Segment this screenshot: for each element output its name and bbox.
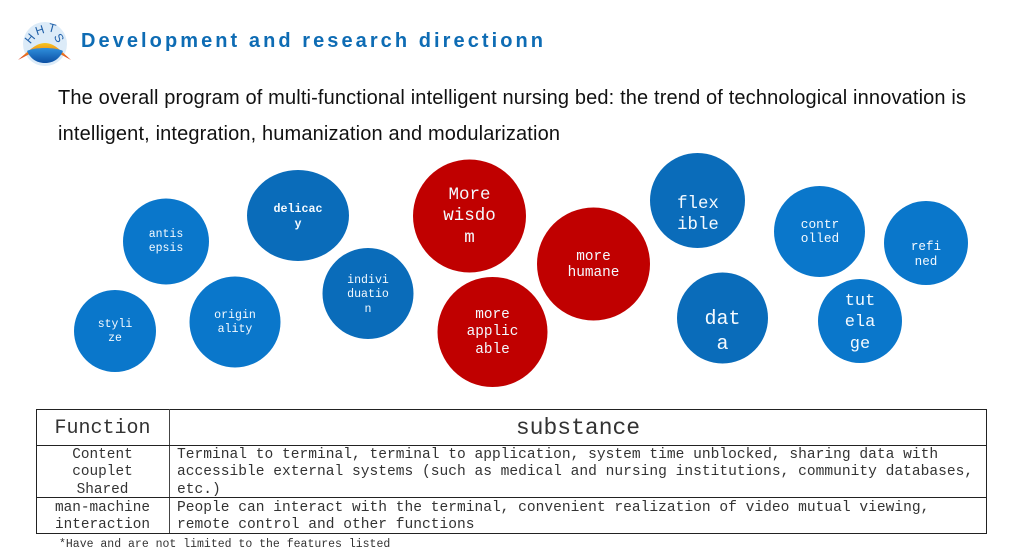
row 1 function: couplet (72, 464, 133, 480)
logo: HHTS globe: H (33, 22, 46, 38)
bubble: data: a (716, 333, 729, 356)
bubble: flexible (650, 153, 745, 248)
bubble: more humane: humane (568, 265, 619, 281)
bubble: originality: origin (214, 309, 256, 322)
intro text: The overall program of multi-functional intelligent nursing bed: the trend of technological innovation is (58, 87, 966, 109)
bubble: more wisdom: wisdo (443, 206, 496, 226)
row 2 function (55, 500, 150, 533)
bubble: more applicable: more (475, 307, 510, 323)
bubble: individuation: duatio (347, 288, 389, 301)
bubble: refined: refi (911, 240, 941, 254)
bubble: delicacy: y (294, 217, 302, 231)
bubble: antisepsis: epsis (149, 242, 183, 255)
bubble: more wisdom: More (448, 185, 491, 205)
table header: substance: substance (516, 415, 640, 441)
bubble: more humane: more (576, 249, 611, 265)
bubble: antisepsis (123, 198, 209, 284)
bubble: tutelage: tut (845, 292, 875, 311)
bubble: more applicable: applic (467, 324, 518, 340)
bubble: refined (884, 201, 968, 285)
bubble: tutelage (818, 279, 902, 363)
bubble: individuation: indivi (347, 274, 389, 287)
bubble: antisepsis: antis (149, 228, 183, 241)
intro text (58, 87, 966, 145)
bubble: more applicable: able (475, 342, 510, 358)
table header: Function: Function (54, 417, 151, 440)
bubble: delicacy (247, 170, 349, 261)
bubble: tutelage: ela (845, 313, 875, 332)
bubble: tutelage: ge (850, 335, 870, 354)
logo: HHTS globe (18, 20, 71, 66)
bubble: more wisdom: m (464, 228, 475, 248)
title: Development and research directionn (81, 30, 543, 52)
bubble: delicacy: delicac (273, 202, 323, 216)
function table (36, 409, 986, 534)
row 2 function: interaction (55, 517, 150, 533)
bubble: individuation: n (365, 303, 371, 316)
bubble: controlled (774, 186, 865, 277)
row 2 substance: People can interact with the terminal, convenient realization of video mutual viewing, (177, 500, 929, 516)
bubble: stylize: styli (98, 318, 132, 331)
footnote: *Have and are not limited to the features listed (59, 538, 390, 551)
row 1 substance: Terminal to terminal, terminal to application, system time unblocked, sharing data with (177, 447, 938, 463)
bubble: controlled: contr (801, 217, 839, 232)
bubble: more applicable (438, 277, 548, 387)
bubble: data (677, 272, 768, 364)
bubble: data: dat (704, 308, 741, 331)
row 1 function: Shared (77, 482, 128, 498)
row 1 function (72, 447, 133, 498)
row 1 substance (177, 447, 973, 498)
bubble: more humane (537, 208, 650, 320)
row 1 substance: accessible external systems (such as medical and nursing institutions, community databases, (177, 464, 973, 480)
bubble: controlled: olled (801, 231, 839, 246)
logo: HHTS globe: H (22, 31, 38, 46)
row 1 function: Content (72, 447, 133, 463)
logo: HHTS globe: T (47, 20, 58, 36)
row 2 substance (177, 500, 929, 533)
row 2 substance: remote control and other functions (177, 517, 474, 533)
bubble: more wisdom (413, 160, 526, 272)
intro text: intelligent, integration, humanization and modularization (58, 123, 560, 145)
bubble: refined: ned (915, 255, 937, 269)
logo: HHTS globe: S (51, 31, 67, 45)
bubble: stylize (74, 290, 156, 372)
row 1 substance: etc.) (177, 482, 221, 498)
bubble: flexible: ible (677, 216, 719, 235)
bubble: flexible: flex (677, 195, 719, 214)
bubble: stylize: ze (108, 332, 122, 345)
bubble: individuation (322, 248, 414, 339)
bubble: originality: ality (218, 323, 252, 336)
bubble: originality (190, 276, 280, 368)
row 2 function: man-machine (55, 500, 150, 516)
